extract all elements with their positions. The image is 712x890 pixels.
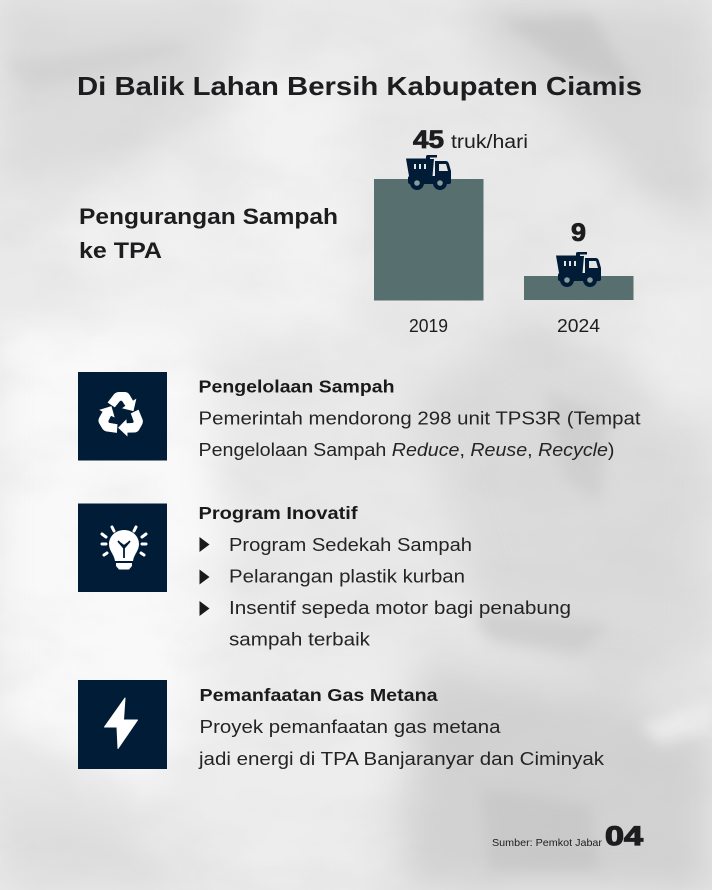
label: 2019: 2019 — [409, 316, 448, 336]
label: 2024: 2024 — [557, 316, 600, 336]
text block — [198, 408, 640, 460]
bar chart: trucks per day — [374, 126, 634, 336]
bullet 1: Program Sedekah Sampah — [229, 534, 472, 555]
bullet 2: Pelarangan plastik kurban — [229, 566, 465, 586]
value: 9: 9 — [571, 219, 586, 247]
icon: recycle — [78, 372, 167, 460]
bullet 3: sampah terbaik — [229, 628, 371, 650]
panel: Program Inovatif — [78, 503, 571, 650]
panel: Pemanfaatan Gas Metana — [78, 680, 605, 769]
bullet 3: Insentif sepeda motor bagi penabung — [229, 597, 571, 618]
icon: light bulb — [78, 504, 167, 592]
bar 2024 — [524, 276, 634, 300]
text block: Proyek pemanfaatan gas metana — [200, 716, 501, 737]
heading: Pengurangan Sampah ke TPA: ke TPA — [79, 238, 162, 263]
value: 45 truk/hari: truk/hari — [451, 132, 528, 153]
heading: Program Inovatif — [198, 503, 358, 523]
value: 45 truk/hari — [413, 126, 528, 154]
heading: Pengurangan Sampah ke TPA: Pengurangan Sampah — [79, 204, 338, 229]
icon: lightning bolt — [78, 680, 167, 769]
heading: Pemanfaatan Gas Metana — [200, 685, 438, 705]
text block: Pengelolaan Sampah Reduce, Reuse, Recycle) — [198, 439, 614, 460]
heading: Pengelolaan Sampah — [198, 376, 394, 396]
panel: Pengelolaan Sampah — [78, 372, 640, 460]
text block — [198, 716, 605, 769]
bullet 3 — [200, 597, 571, 650]
bullet list — [200, 534, 571, 650]
icon: truck 2024 — [556, 252, 601, 287]
text block: Pemerintah mendorong 298 unit TPS3R (Tempat — [198, 408, 640, 428]
icon: truck 2019 — [406, 155, 451, 190]
bar 2019 — [374, 179, 484, 300]
page number: 04 — [605, 821, 643, 851]
title: Di Balik Lahan Bersih Kabupaten Ciamis — [77, 71, 642, 101]
heading: Pengurangan Sampah ke TPA — [79, 204, 338, 263]
text block: jadi energi di TPA Banjaranyar dan Ciminyak — [198, 748, 605, 769]
source note: Sumber: Pemkot Jabar — [492, 837, 603, 849]
value: 45 truk/hari: 45 — [413, 126, 444, 154]
